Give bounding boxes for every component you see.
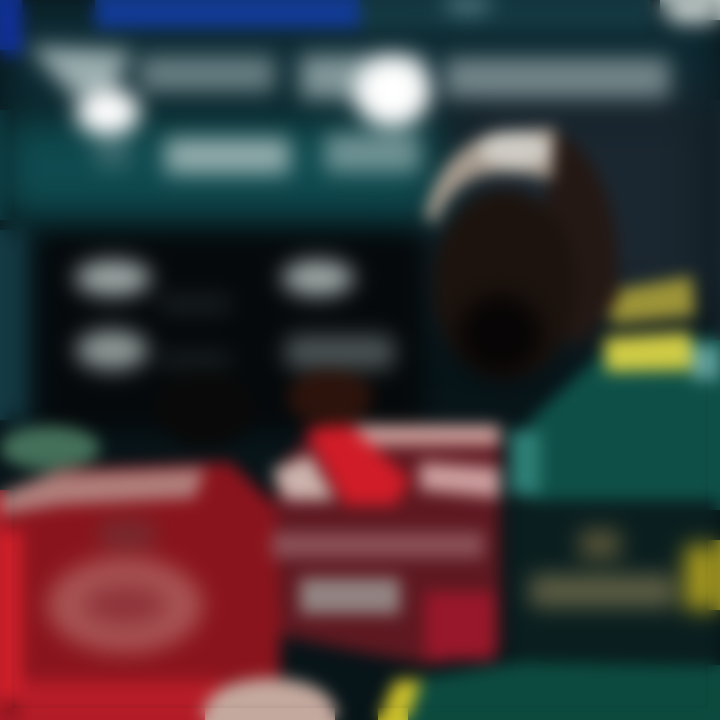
scoreboard text blobs [75,260,395,370]
headband highlight [425,128,555,225]
bright red edge [0,530,22,700]
title placeholder: first blurred line [28,46,670,99]
jersey number patch [47,520,203,653]
blue top banner [0,0,650,55]
player: right figure in green jacket [425,128,720,660]
bottom: yellow stripe [378,680,422,720]
bottom: pale foreground head [202,678,338,720]
left teal edge [0,230,25,420]
jacket lettering [530,530,720,610]
title placeholder: second blurred line [95,134,420,174]
jacket [530,335,720,520]
player: centre figure in striped jersey [272,370,500,665]
white shoulder stripe [0,468,205,515]
teal header band [0,118,440,218]
dark scoreboard panel [42,235,422,430]
hair [540,130,619,350]
jersey stripes [272,425,500,660]
bottom: green jacket sleeve [392,662,720,720]
stadium flares [76,56,430,136]
jacket sleeve highlight [510,430,540,495]
yellow collar [604,276,720,380]
face [433,190,577,380]
green shoulder behind [0,426,100,470]
player: left figure in red jersey [0,372,280,720]
top corner lights [442,0,720,22]
